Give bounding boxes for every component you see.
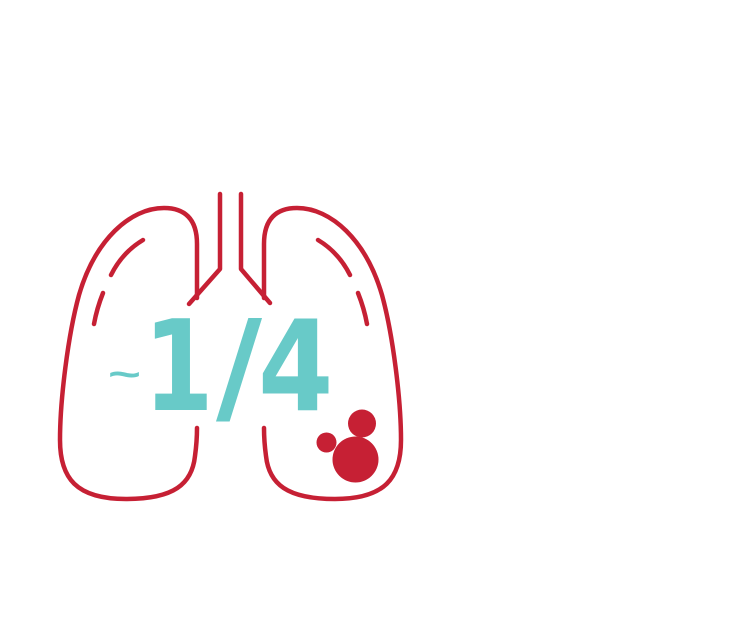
right lung inner lines: [318, 240, 367, 324]
right lung: [264, 208, 401, 499]
statistic: approximately one quarter: [108, 293, 333, 440]
left lung inner lines: [94, 240, 143, 324]
icon: tumour circles: [316, 410, 378, 482]
icon: lungs outline: [60, 194, 401, 499]
digit one: 1: [144, 293, 214, 440]
tilde: ~: [108, 354, 141, 396]
slash: /: [216, 293, 263, 440]
trachea: [189, 194, 270, 304]
digit four: 4: [258, 293, 333, 440]
left lung: [60, 208, 197, 499]
